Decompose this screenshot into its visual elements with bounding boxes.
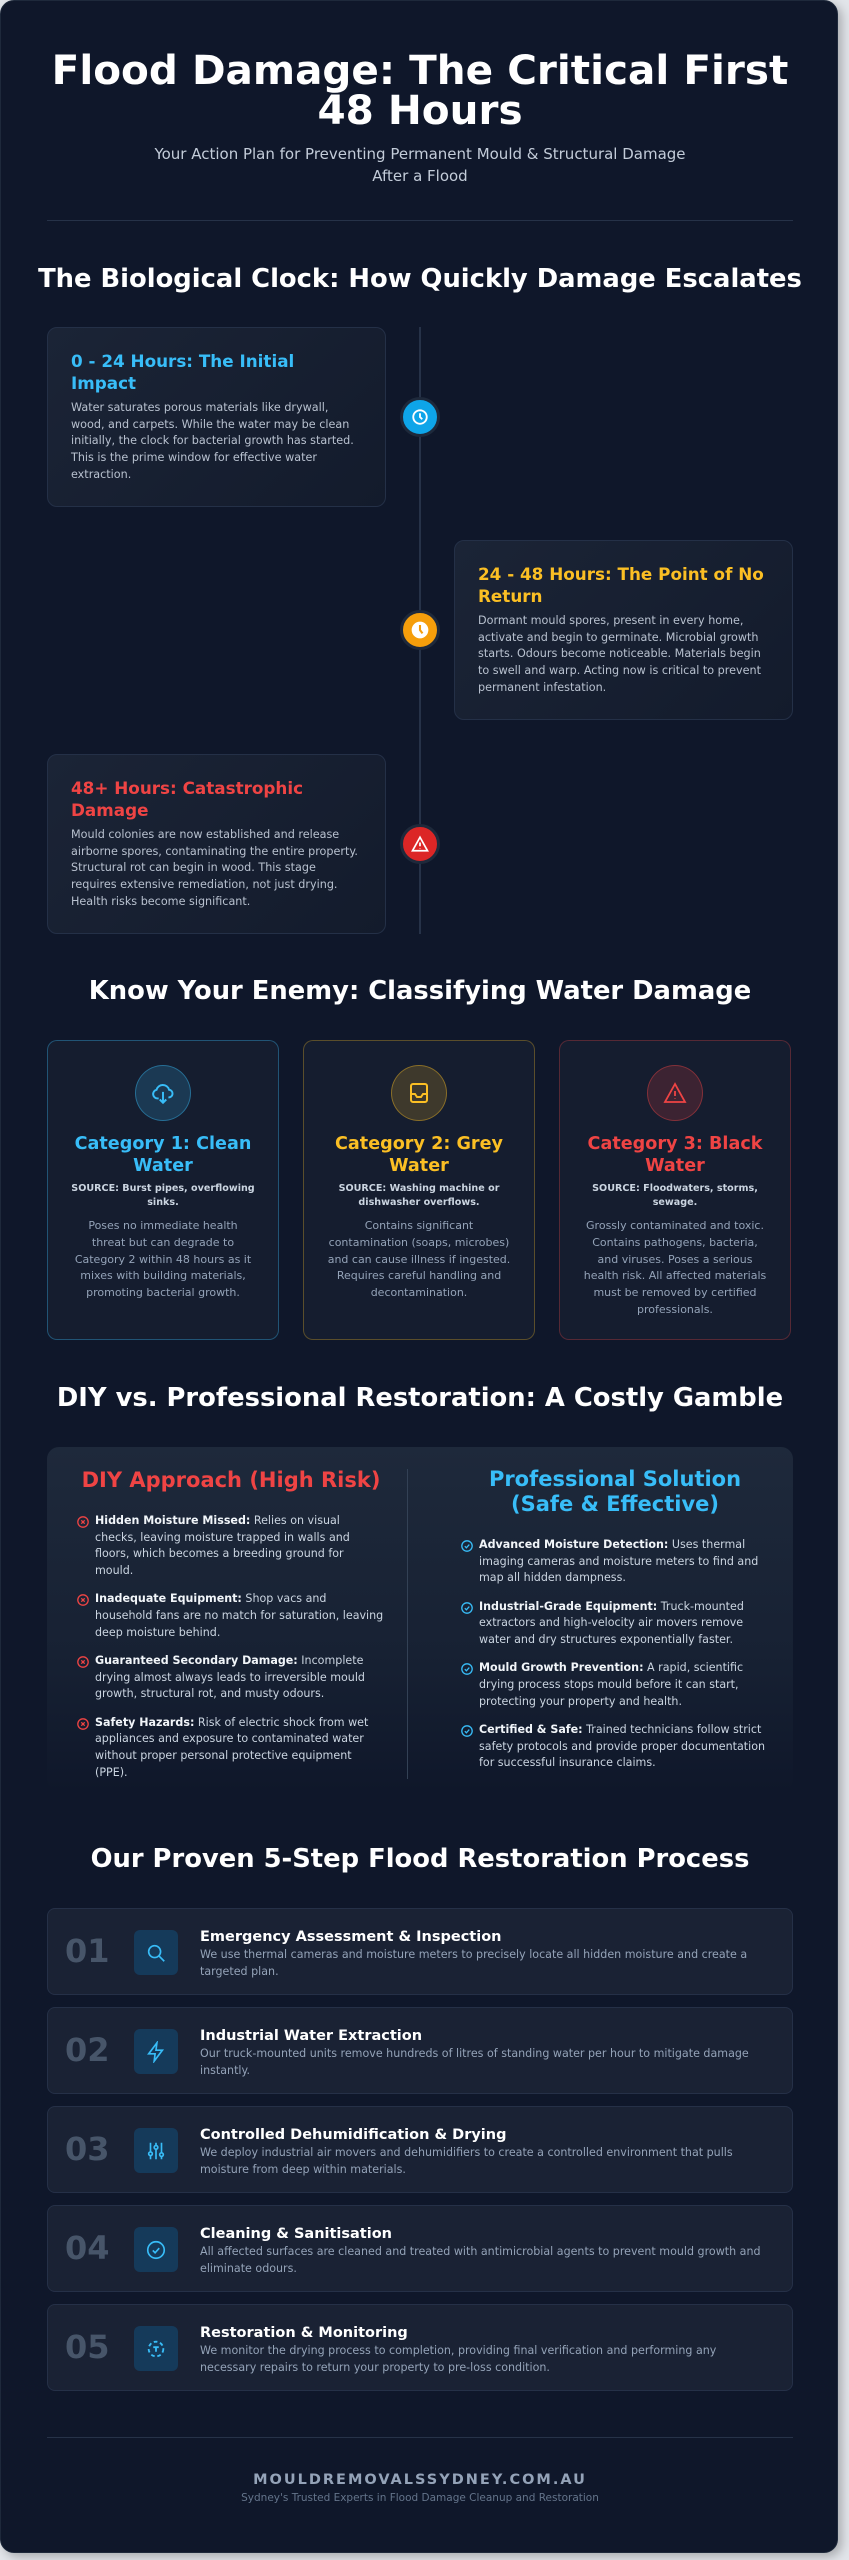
panel: category 2 — [303, 1040, 535, 1340]
step 5 — [47, 2304, 793, 2391]
column: professional: Industrial-Grade Equipment: Truck-mounted extractors and high-velocity air movers remove water and dry structures exponentially faster. — [479, 1600, 744, 1646]
card: 24-48 hours — [454, 540, 793, 720]
step 2: Our truck-mounted units remove hundreds of litres of standing water per hour to mitigate damage instantly. — [200, 2047, 749, 2077]
card: 48+ hours: 48+ Hours: Catastrophic Damage — [71, 778, 303, 820]
panel: comparison — [47, 1447, 793, 1792]
subtitle: Your Action Plan for Preventing Permanent Mould & Structural Damage — [154, 145, 686, 163]
step 1: We use thermal cameras and moisture meters to precisely locate all hidden moisture and create a targeted plan. — [200, 1948, 747, 1978]
panel: category 2: SOURCE: Washing machine or dishwasher overflows. — [339, 1183, 499, 1208]
subtitle — [154, 145, 686, 185]
column: DIY: Safety Hazards: Risk of electric shock from wet appliances and exposure to contaminated water without proper personal protective equipment (PPE). — [95, 1716, 368, 1779]
step 3: We deploy industrial air movers and dehumidifiers to create a controlled environment that pulls moisture from deep within materials. — [200, 2146, 733, 2176]
step 4: All affected surfaces are cleaned and treated with antimicrobial agents to prevent mould growth and eliminate odours. — [200, 2245, 761, 2275]
panel: category 2: Category 2: Grey Water — [335, 1134, 503, 1176]
step 3: 03 — [65, 2130, 110, 2168]
column: professional: Mould Growth Prevention: A rapid, scientific drying process stops mould before it can start, protecting your property and health. — [479, 1661, 743, 1708]
panel: category 1: SOURCE: Burst pipes, overflowing sinks. — [71, 1183, 255, 1208]
column: DIY: DIY Approach (High Risk) — [82, 1468, 380, 1492]
icon: warning red — [400, 824, 440, 864]
step 4: Cleaning & Sanitisation — [200, 2226, 392, 2242]
card: 0-24 hours: Water saturates porous materials like drywall, wood, and carpets. While the water may be clean initially, the clock for bacterial growth has started. This is the prime window for effective water extraction. — [71, 401, 354, 481]
subtitle: After a Flood — [372, 167, 468, 185]
icon: warning — [647, 1065, 703, 1121]
card: 0-24 hours: 0 - 24 Hours: The Initial Impact — [71, 351, 294, 393]
icon: dashed circle — [134, 2326, 178, 2371]
footer: MOULDREMOVALSSYDNEY.COM.AU — [253, 2472, 587, 2488]
step 5: Restoration & Monitoring — [200, 2325, 408, 2341]
icon: check circle — [134, 2227, 178, 2272]
card: 24-48 hours: Dormant mould spores, present in every home, activate and begin to germinate. Microbial growth starts. Odours become noticeable. Materials begin to swell and warp. Acting now is critical to prevent permanent infestation. — [478, 614, 761, 694]
step 3: Controlled Dehumidification & Drying — [200, 2127, 506, 2143]
panel: category 1: Category 1: Clean Water — [75, 1134, 251, 1176]
step 4: 04 — [65, 2229, 110, 2267]
footer — [241, 2472, 599, 2504]
icon: tray — [391, 1065, 447, 1121]
panel: category 3: Category 3: Black Water — [588, 1134, 762, 1176]
icon: clock orange — [400, 610, 440, 650]
title: 48 Hours — [317, 86, 523, 134]
panel: category 1 — [47, 1040, 279, 1340]
step 3 — [47, 2106, 793, 2193]
heading: know your enemy: Know Your Enemy: Classifying Water Damage — [89, 976, 751, 1006]
footer: Sydney's Trusted Experts in Flood Damage Cleanup and Restoration — [241, 2492, 599, 2504]
title: Flood Damage: The Critical First — [52, 46, 788, 94]
panel: category 3: Grossly contaminated and toxic. Contains pathogens, bacteria, and viruses. Poses a serious health risk. All affected materials must be removed by certified professionals. — [584, 1219, 766, 1316]
panel: category 3 — [559, 1040, 791, 1340]
step 4 — [47, 2205, 793, 2292]
icon: sliders — [134, 2128, 178, 2173]
step 1: 01 — [65, 1932, 110, 1970]
step 2: Industrial Water Extraction — [200, 2028, 422, 2044]
column: DIY: Inadequate Equipment: Shop vacs and household fans are no match for saturation, leaving deep moisture behind. — [95, 1592, 383, 1639]
step 5: We monitor the drying process to completion, providing final verification and performing any necessary repairs to return your property to pre-loss condition. — [200, 2344, 716, 2374]
icon: search — [134, 1930, 178, 1975]
column: DIY: Hidden Moisture Missed: Relies on visual checks, leaving moisture trapped in walls and floors, which becomes a breeding ground for mould. — [95, 1514, 350, 1577]
column: professional: Professional Solution (Safe & Effective) — [489, 1467, 741, 1516]
step 1: Emergency Assessment & Inspection — [200, 1929, 502, 1945]
column: professional: Advanced Moisture Detection: Uses thermal imaging cameras and moisture meters to find and map all hidden dampness. — [479, 1538, 758, 1584]
step 1 — [47, 1908, 793, 1995]
panel: category 1: Poses no immediate health threat but can degrade to Category 2 within 48 hours as it mixes with building materials, promoting bacterial growth. — [75, 1219, 251, 1299]
column: professional — [461, 1467, 765, 1769]
icon: cloud download — [135, 1065, 191, 1121]
card: 0-24 hours — [47, 327, 386, 507]
timeline — [47, 327, 793, 934]
icon: bolt — [134, 2029, 178, 2074]
heading: biological clock: The Biological Clock: How Quickly Damage Escalates — [38, 264, 802, 294]
card: 48+ hours: Mould colonies are now established and release airborne spores, contaminating the entire property. Structural rot can begin in wood. This stage requires extensive remediation, not just drying. Health risks become significant. — [71, 828, 358, 908]
step 2: 02 — [65, 2031, 110, 2069]
column: DIY — [77, 1468, 383, 1779]
column: DIY: Guaranteed Secondary Damage: Incomplete drying almost always leads to irreversible mould growth, structural rot, and musty odours. — [95, 1654, 365, 1700]
icon: clock blue — [400, 397, 440, 437]
step 2 — [47, 2007, 793, 2094]
column: professional: Certified & Safe: Trained technicians follow strict safety protocols and provide proper documentation for successful insurance claims. — [479, 1723, 765, 1769]
heading: 5-step process: Our Proven 5-Step Flood Restoration Process — [91, 1844, 749, 1874]
card: 24-48 hours: 24 - 48 Hours: The Point of No Return — [478, 564, 764, 606]
step 5: 05 — [65, 2328, 110, 2366]
card: 48+ hours — [47, 754, 386, 934]
panel: category 2: Contains significant contamination (soaps, microbes) and can cause illness if ingested. Requires careful handling and decontamination. — [328, 1219, 510, 1299]
heading: DIY vs pro: DIY vs. Professional Restoration: A Costly Gamble — [57, 1383, 783, 1413]
title — [52, 46, 788, 134]
panel: category 3: SOURCE: Floodwaters, storms, sewage. — [592, 1183, 758, 1208]
